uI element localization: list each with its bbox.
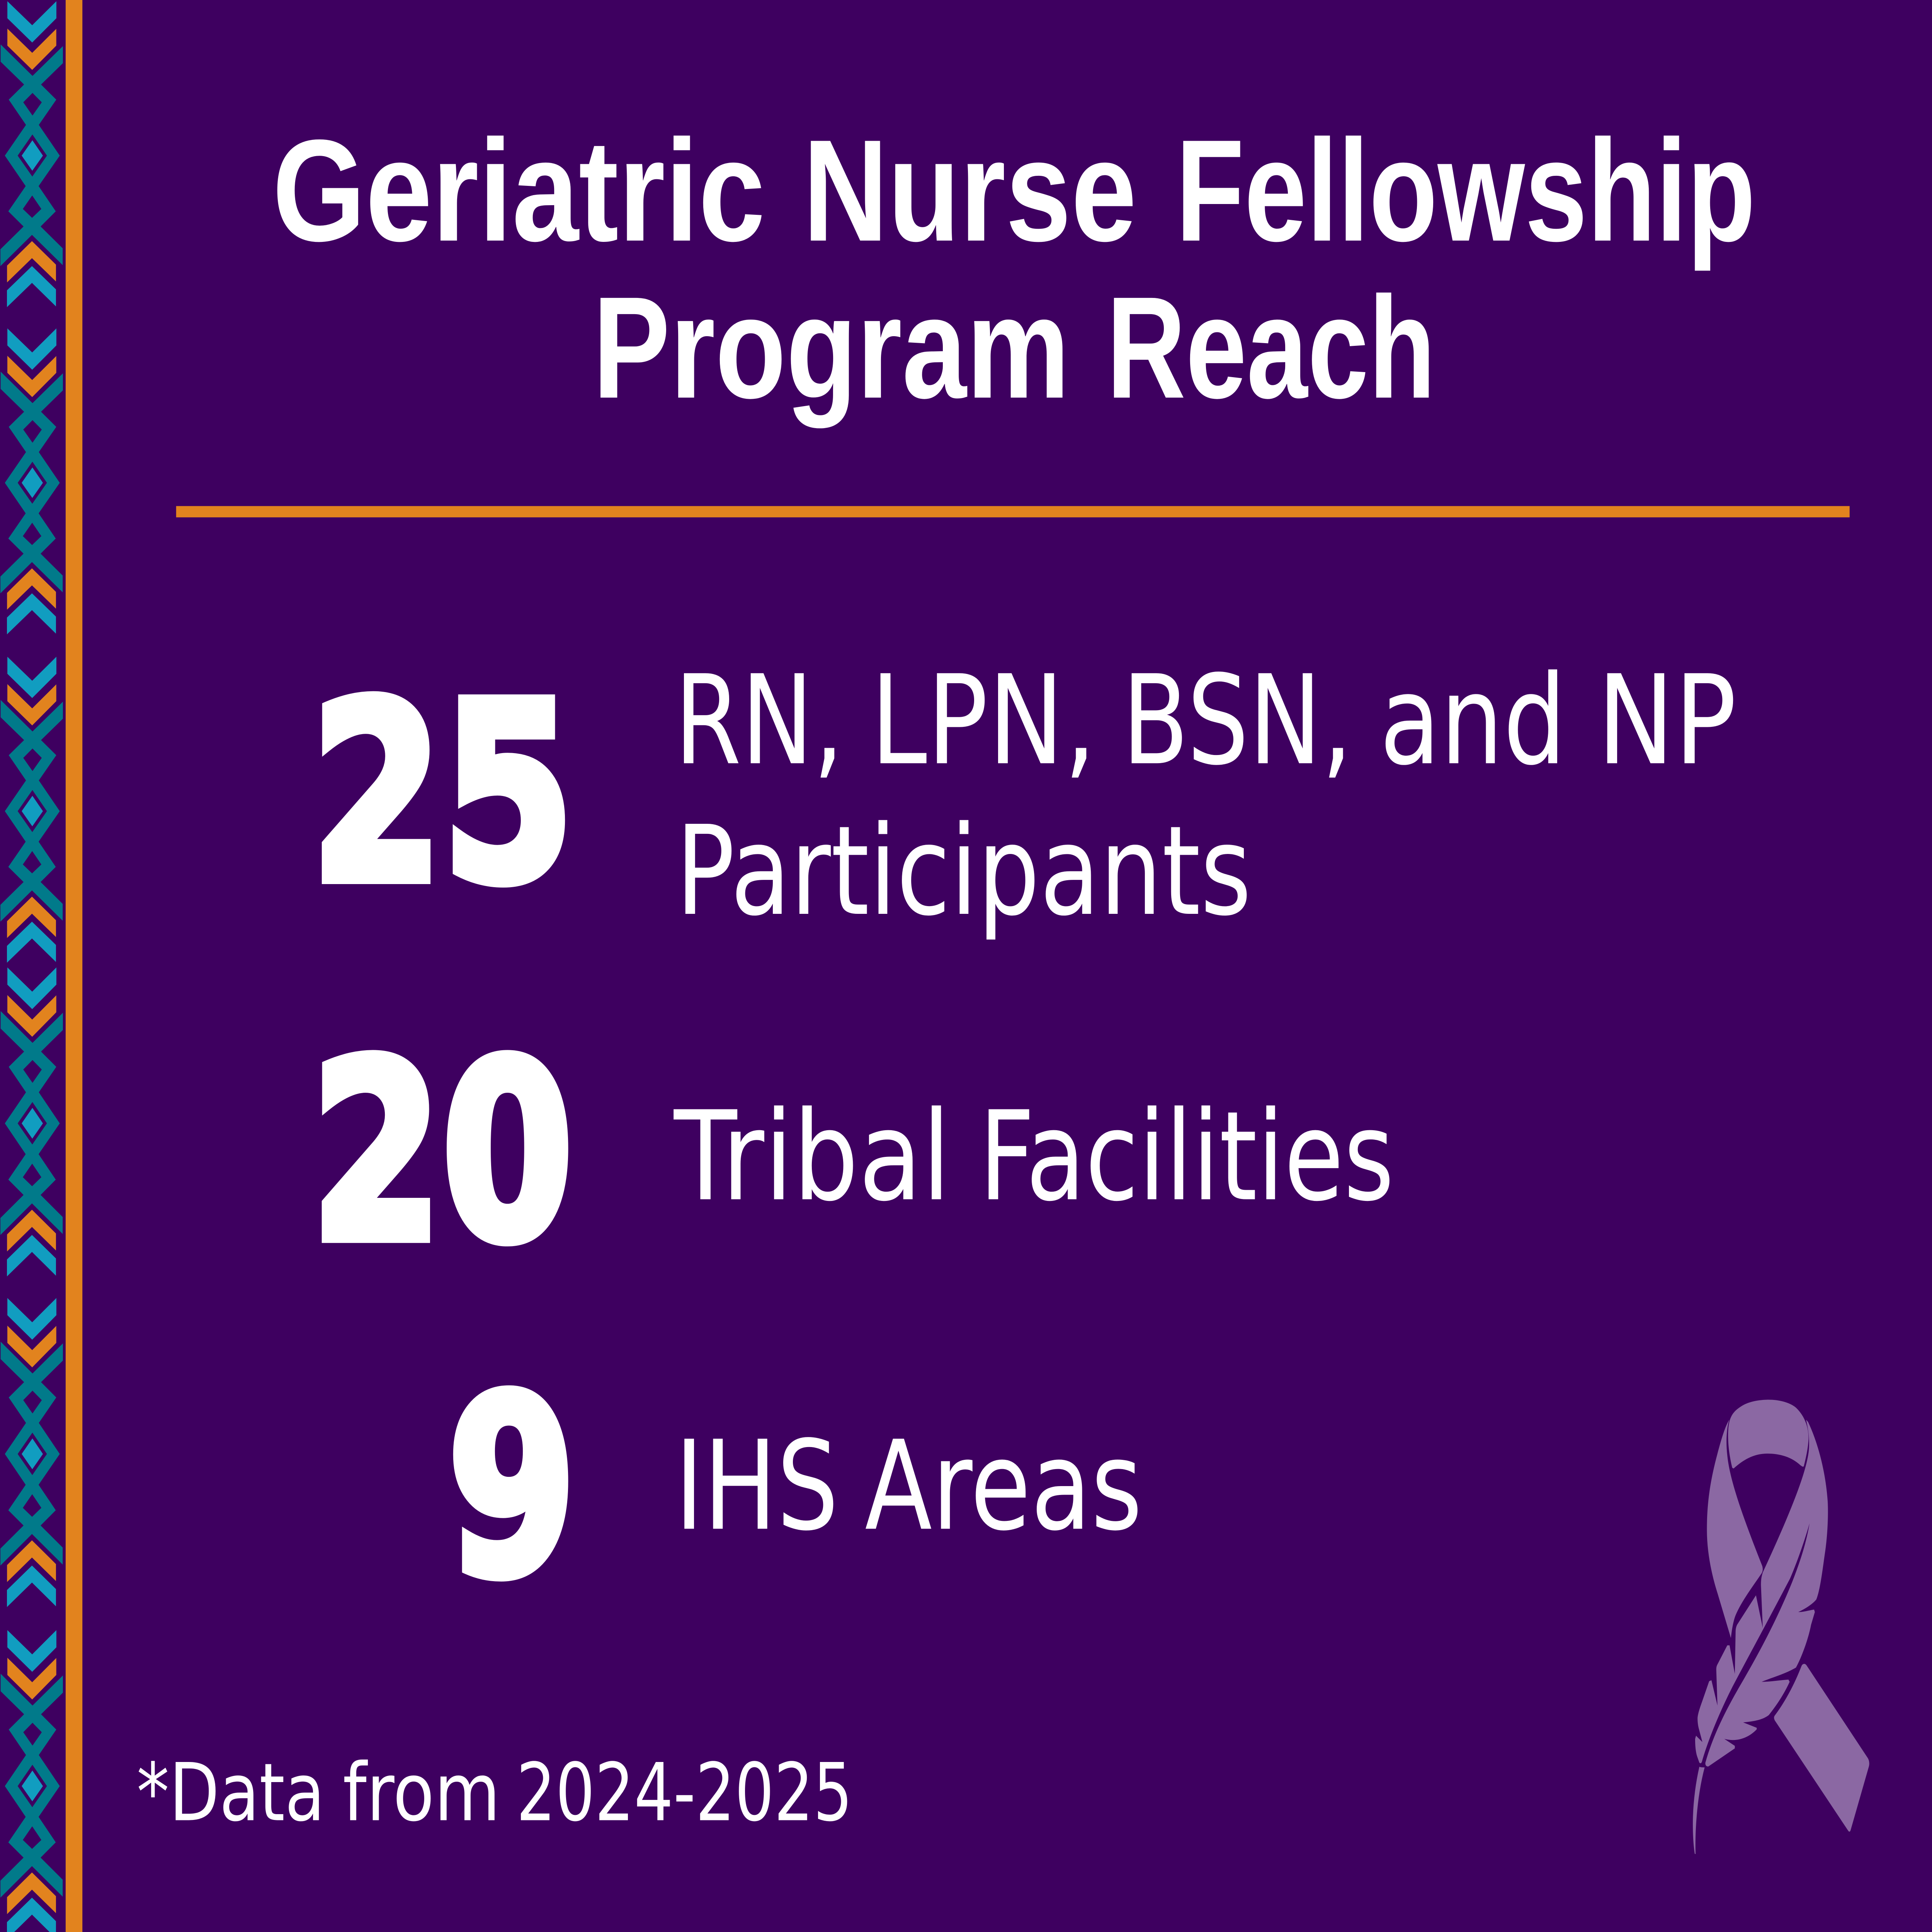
title: Program <box>593 267 1070 429</box>
number 25: 25 <box>311 651 574 936</box>
label: participants: LPN, <box>871 648 1096 793</box>
label: participants: Participants <box>676 799 1252 943</box>
stat row: 25 participants <box>311 648 1736 943</box>
label: participants: RN, <box>675 648 844 793</box>
label: tribal facilities: Tribal <box>672 1085 951 1229</box>
title <box>272 110 1755 429</box>
stat row: 20 tribal facilities <box>311 1010 1394 1295</box>
label: participants: NP <box>1597 648 1736 793</box>
title: Nurse <box>803 110 1137 272</box>
footnote: *Data <box>137 1746 325 1839</box>
label: IHS areas: Areas <box>865 1414 1142 1558</box>
number 20: 20 <box>311 1010 573 1295</box>
footnote: 2024-2025 <box>516 1746 852 1839</box>
footnote: from <box>343 1746 500 1839</box>
title: Reach <box>1107 267 1435 429</box>
label: participants <box>675 648 1736 943</box>
label: participants: BSN, <box>1122 648 1352 793</box>
label: IHS areas: IHS <box>675 1414 838 1558</box>
title: Geriatric <box>272 110 765 272</box>
stat row: 9 IHS areas <box>448 1345 1142 1630</box>
orange vertical bar <box>66 0 82 1932</box>
label: tribal facilities: Facilities <box>979 1085 1394 1229</box>
decorative tribal border pattern <box>0 1 63 1932</box>
title: Fellowship <box>1176 110 1755 272</box>
label: participants: and <box>1379 648 1566 793</box>
icon: purple feather ribbon <box>1693 1400 1869 1854</box>
orange divider under title <box>176 506 1850 517</box>
number 9: 9 <box>448 1345 576 1630</box>
